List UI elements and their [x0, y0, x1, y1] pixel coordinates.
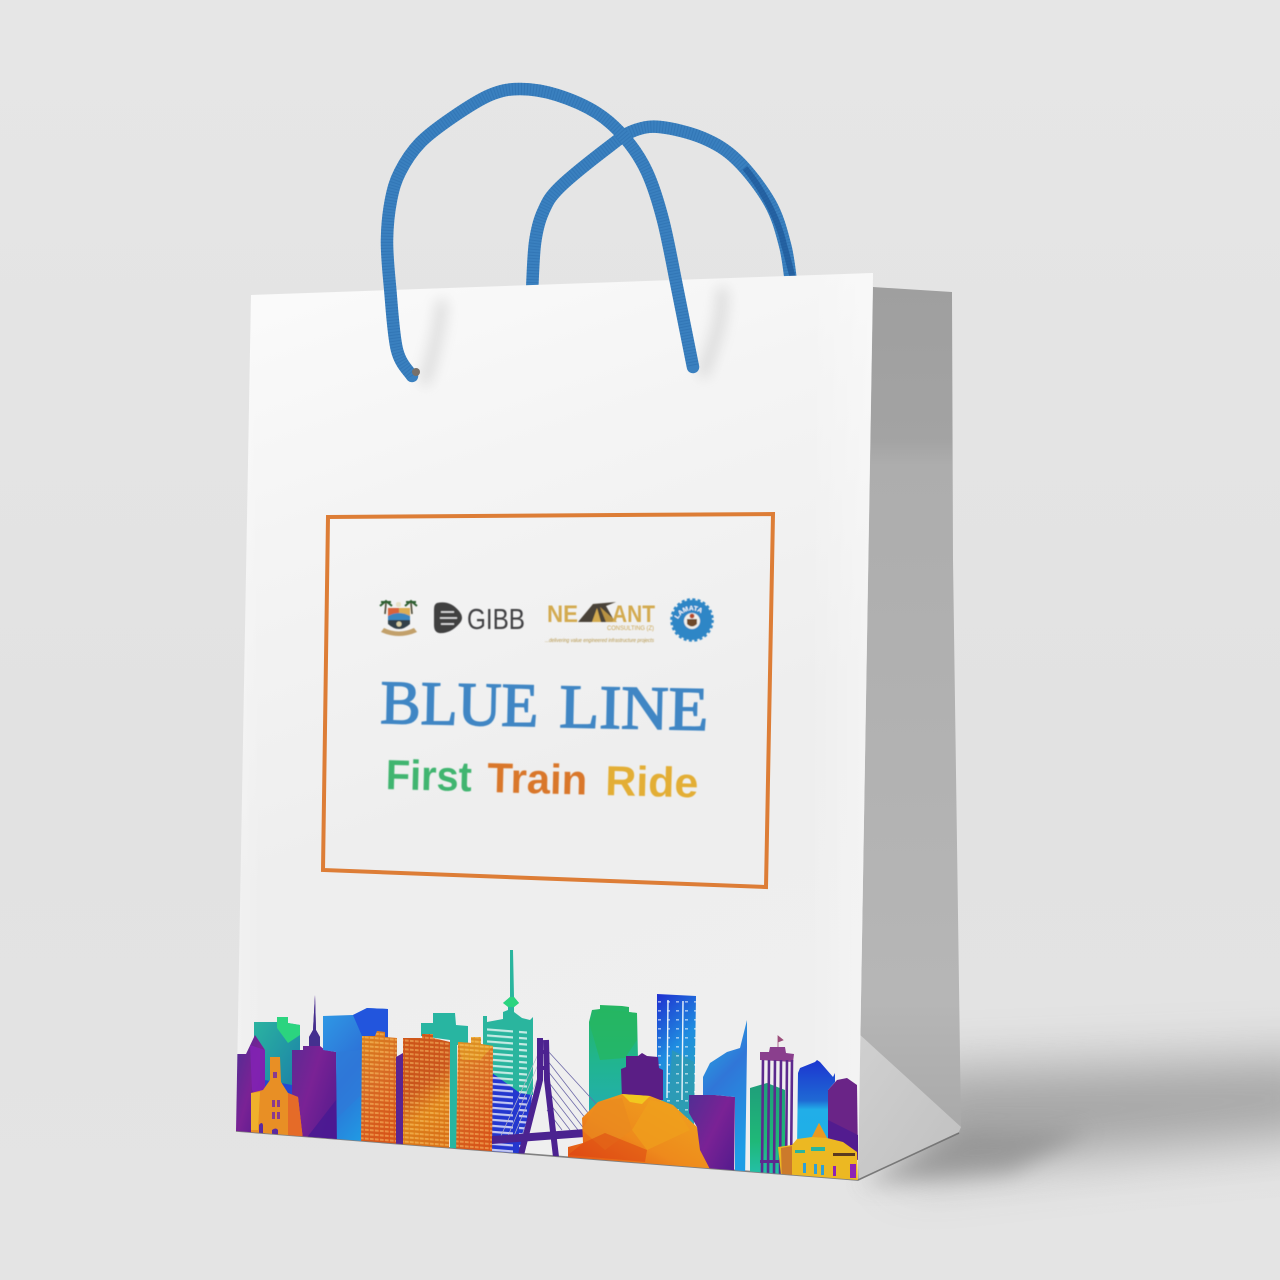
logo: GIBB [434, 602, 525, 636]
logo: Nexant Consulting [545, 601, 655, 644]
skyline: orange dome [568, 1094, 713, 1175]
skyline: orange tower one [361, 1031, 397, 1150]
skyline: green block [750, 1083, 785, 1180]
logo: Nexant Consulting: ANT [612, 601, 655, 628]
logo: LAMATA: LAMATA [674, 604, 702, 620]
orange frame [323, 514, 773, 887]
gift bag mockup scene [236, 82, 1280, 1202]
skyline: green tower [589, 1005, 638, 1115]
skyline: yellow colonial house [778, 1123, 858, 1185]
skyline: orange tower three [456, 1037, 493, 1155]
skyline: orange tower two [396, 1034, 450, 1152]
bag front panel [236, 273, 959, 1180]
multicoloured city skyline [235, 950, 858, 1185]
skyline: spired purple church tower [292, 995, 338, 1145]
skyline: blue curved tower [323, 1008, 397, 1150]
skyline: right blue building [797, 1060, 835, 1139]
logo: Lagos coat of arms [380, 601, 417, 636]
front rope handle [387, 89, 693, 376]
skyline: purple block above dome [621, 1053, 663, 1100]
subtitle: First Train Ride: First [385, 751, 472, 800]
subtitle: First Train Ride [385, 751, 699, 806]
skyline: blue spire building [703, 1020, 747, 1180]
title: BLUE LINE: LINE [559, 673, 709, 744]
logo: Nexant Consulting: NE [547, 601, 578, 628]
skyline: church front [251, 1057, 303, 1140]
title: BLUE LINE: BLUE [380, 669, 539, 740]
title: BLUE LINE [380, 669, 709, 744]
logo: Nexant Consulting: CONSULTING (Z) [607, 625, 654, 632]
skyline: domed purple building [828, 1078, 858, 1160]
subtitle: First Train Ride: Ride [605, 757, 699, 806]
logo row [378, 598, 715, 644]
bag side gusset [858, 287, 961, 1180]
floor shadow [860, 1058, 1280, 1184]
back rope handle [532, 127, 794, 292]
logo: Nexant Consulting: ...delivering value engineered infrastructure projects [545, 638, 654, 644]
logo: GIBB: GIBB [467, 604, 525, 636]
logo: LAMATA [669, 598, 715, 642]
skyline: blue glass tower [657, 994, 696, 1125]
skyline: teal block middle [421, 1013, 468, 1150]
side fold [858, 1033, 961, 1180]
skyline: Lekki link bridge [492, 1038, 600, 1157]
skyline: teal block behind left [254, 1017, 300, 1094]
skyline: left purple building [235, 1035, 265, 1140]
subtitle: First Train Ride: Train [487, 754, 588, 804]
skyline: columned purple tower [760, 1036, 794, 1175]
skyline: dark purple block [689, 1095, 735, 1170]
skyline: tall teal tower with mast [483, 950, 533, 1160]
